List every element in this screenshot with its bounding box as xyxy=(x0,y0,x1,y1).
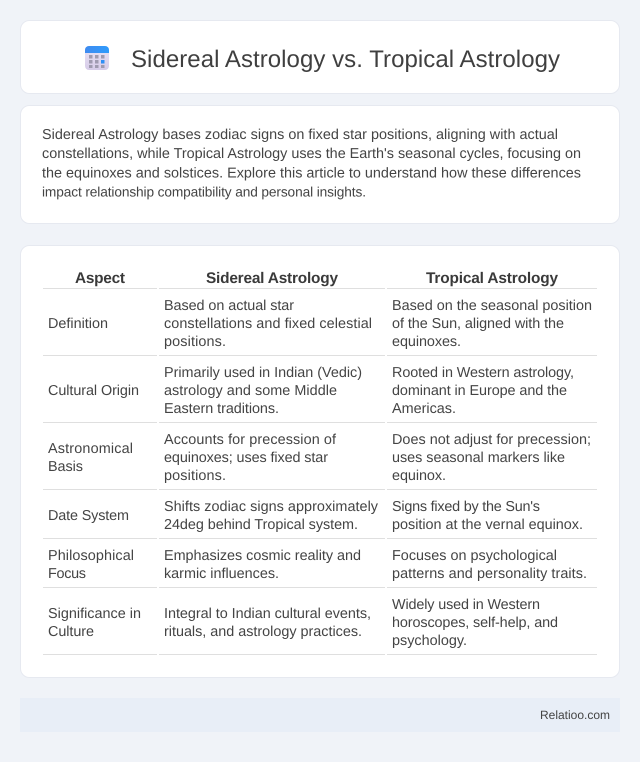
row: definition xyxy=(43,298,597,356)
row: astronomical basis: Accounts for precession of xyxy=(164,432,337,448)
row: definition: of the Sun, aligned with the xyxy=(392,316,564,332)
row: astronomical basis: equinox. xyxy=(392,468,446,484)
row: cultural origin: Eastern traditions. xyxy=(164,401,279,417)
row: definition: Based on actual star xyxy=(164,298,294,314)
table header row: Aspect xyxy=(75,270,125,287)
text block: introduction paragraph: constellations, while Tropical Astrology uses the Earth's seasonal cycles, focusing on xyxy=(42,146,581,162)
row: astronomical basis xyxy=(43,432,597,490)
text block: introduction paragraph: the equinoxes and solstices. Explore this article to understand how these differences xyxy=(42,166,581,182)
row: significance in culture: Integral to Indian cultural events, xyxy=(164,606,371,622)
row: philosophical focus: Philosophical xyxy=(48,548,134,564)
row: significance in culture xyxy=(43,597,597,654)
row: date system: Signs fixed by the Sun's xyxy=(392,499,540,515)
row: cultural origin: dominant in Europe and the xyxy=(392,383,567,399)
footer bar xyxy=(20,698,620,732)
table header row: Tropical Astrology xyxy=(426,270,558,287)
row: significance in culture: Widely used in Western xyxy=(392,597,540,613)
row: date system: Shifts zodiac signs approximately xyxy=(164,499,379,515)
row: astronomical basis: Astronomical xyxy=(48,441,133,457)
text block: introduction paragraph xyxy=(42,127,581,200)
row: significance in culture: psychology. xyxy=(392,633,467,649)
icon: calendar xyxy=(85,46,109,70)
table header row xyxy=(43,270,597,288)
row: cultural origin: Primarily used in Indian (Vedic) xyxy=(164,365,362,381)
row: cultural origin: Rooted in Western astrology, xyxy=(392,365,574,381)
row: date system: Date System xyxy=(48,508,129,524)
row: definition: Based on the seasonal position xyxy=(392,298,592,314)
title: Sidereal Astrology vs. Tropical Astrology xyxy=(131,46,560,73)
panel: introduction xyxy=(20,106,620,224)
row: definition: equinoxes. xyxy=(392,334,461,350)
row: cultural origin: astrology and some Middle xyxy=(164,383,337,399)
row: cultural origin: Americas. xyxy=(392,401,456,417)
row: astronomical basis: Basis xyxy=(48,459,83,475)
row: cultural origin: Cultural Origin xyxy=(48,383,139,399)
row: definition: Definition xyxy=(48,316,108,332)
row: date system: position at the vernal equinox. xyxy=(392,517,583,533)
row: philosophical focus: patterns and personality traits. xyxy=(392,566,587,582)
row: astronomical basis: equinoxes; uses fixed star xyxy=(164,450,328,466)
row: astronomical basis: positions. xyxy=(164,468,226,484)
row: significance in culture: horoscopes, self-help, and xyxy=(392,615,558,631)
row: significance in culture: Culture xyxy=(48,624,94,640)
row: significance in culture: rituals, and astrology practices. xyxy=(164,624,362,640)
row: astronomical basis: uses seasonal markers like xyxy=(392,450,565,466)
panel: title card xyxy=(20,20,620,94)
footer text: Relatioo.com xyxy=(540,708,610,722)
row: astronomical basis: Does not adjust for precession; xyxy=(392,432,591,448)
row: philosophical focus: Focuses on psychological xyxy=(392,548,557,564)
row: significance in culture: Significance in xyxy=(48,606,141,622)
text block: introduction paragraph: Sidereal Astrology bases zodiac signs on fixed star positions, aligning with actual xyxy=(42,127,558,143)
row: philosophical focus: Emphasizes cosmic reality and xyxy=(164,548,361,564)
row: definition: constellations and fixed celestial xyxy=(164,316,372,332)
text block: introduction paragraph: impact relationship compatibility and personal insights. xyxy=(42,184,366,200)
panel: comparison table xyxy=(20,246,620,678)
row: date system xyxy=(43,499,597,538)
row: philosophical focus: Focus xyxy=(48,566,86,582)
row: definition: positions. xyxy=(164,334,226,350)
row: date system: 24deg behind Tropical system. xyxy=(164,517,358,533)
row: philosophical focus: karmic influences. xyxy=(164,566,279,582)
table header row: Sidereal Astrology xyxy=(206,270,338,287)
row: philosophical focus xyxy=(43,548,597,588)
row: cultural origin xyxy=(43,365,597,422)
